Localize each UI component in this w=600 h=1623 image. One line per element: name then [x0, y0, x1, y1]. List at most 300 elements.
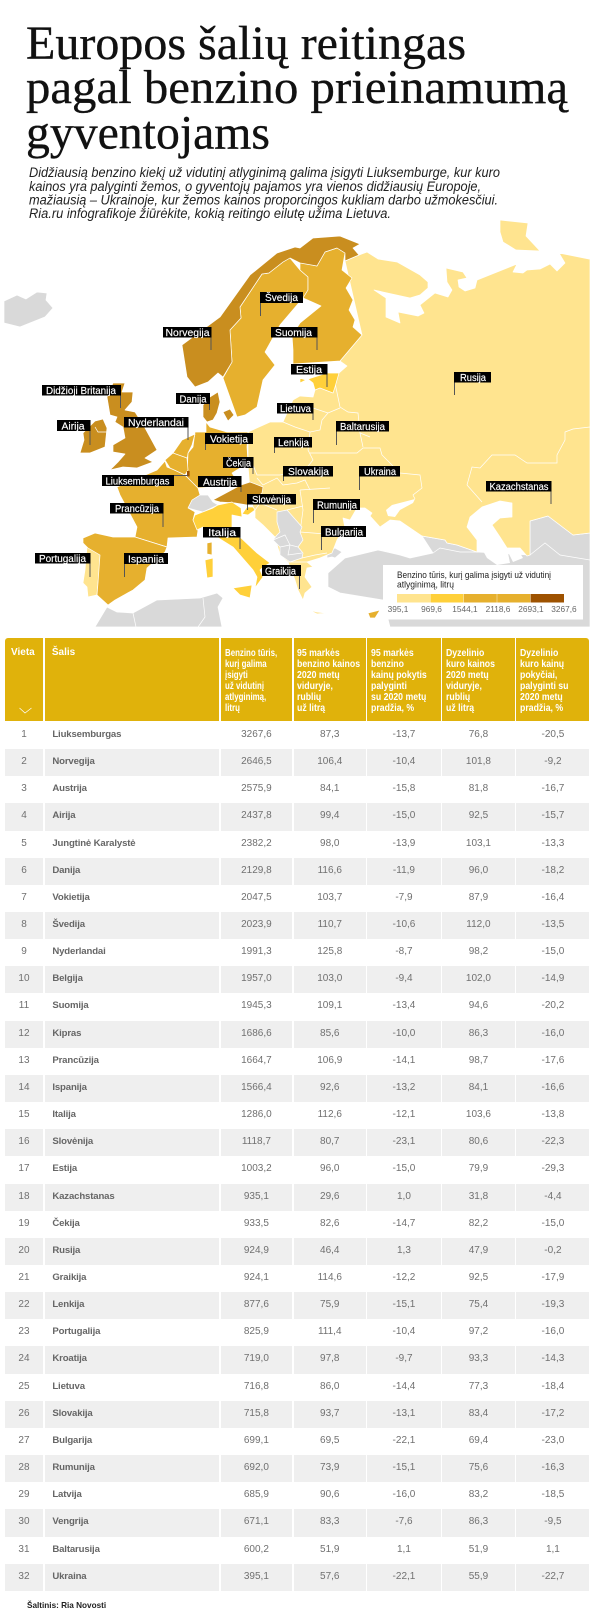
header: benzino kainos: 95 markės	[297, 648, 340, 658]
row 14: 92,6	[320, 1082, 340, 1093]
header: benzino kainų pokytis: su 2020 metų	[371, 692, 427, 702]
header: Vieta	[4, 638, 43, 721]
row 5: 2382,2	[241, 838, 272, 849]
row 9: 98,2	[469, 946, 488, 957]
label: Portugalija: Portugalija	[39, 553, 86, 565]
row 4: 99,4	[320, 810, 340, 821]
row 15: 1286,0	[241, 1109, 272, 1120]
row 17: -15,0	[393, 1163, 415, 1174]
row 2: -10,4	[393, 756, 415, 767]
row 18: -4,4	[544, 1191, 562, 1202]
row 21: -17,9	[542, 1272, 564, 1283]
label: Kazachstanas: Kazachstanas	[490, 481, 548, 493]
label: Suomija: Suomija	[275, 327, 312, 339]
row 3: 81,8	[469, 783, 488, 794]
row 29	[18, 1489, 564, 1500]
legend	[383, 565, 583, 620]
row 14: -16,6	[542, 1082, 564, 1093]
row 29: -16,0	[393, 1489, 415, 1500]
row 6: Danija	[52, 865, 80, 876]
row 5: 5	[21, 838, 27, 849]
label: Baltarusija	[336, 421, 389, 445]
row 31: Baltarusija	[52, 1544, 100, 1555]
map of Europe	[4, 220, 590, 627]
row 26: -13,1	[393, 1408, 415, 1419]
row 23: 825,9	[244, 1326, 269, 1337]
row 27	[18, 1435, 564, 1446]
row 7: 7	[21, 892, 27, 903]
label: Airija	[57, 420, 90, 445]
row 8: 8	[21, 919, 27, 930]
row 15: 103,6	[466, 1109, 491, 1120]
row 22: 22	[18, 1299, 30, 1310]
row 32: 32	[18, 1571, 30, 1582]
row 21: 92,5	[469, 1272, 488, 1283]
row 25: 25	[18, 1381, 30, 1392]
row 19: -14,7	[393, 1218, 415, 1229]
row 10: -9,4	[395, 973, 413, 984]
row 18: 1,0	[397, 1191, 411, 1202]
title: Europos šalių reitingas	[26, 17, 466, 70]
header: benzino kainų pokytis	[367, 638, 441, 721]
map: Caspian, Azov and Black Sea details	[386, 499, 523, 565]
row 10: 1957,0	[241, 973, 272, 984]
row 7: -7,9	[395, 892, 413, 903]
row 31: 1,1	[546, 1544, 560, 1555]
row 13: 98,7	[469, 1055, 488, 1066]
row 19: 82,2	[469, 1218, 488, 1229]
header: dyzelino kainų pokyčiai	[516, 638, 589, 721]
row 23: -16,0	[542, 1326, 564, 1337]
row 6: -18,2	[542, 865, 564, 876]
row 25: Lietuva	[52, 1381, 85, 1392]
label: Nyderlandai: Nyderlandai	[128, 417, 184, 429]
row 25: -18,4	[542, 1381, 564, 1392]
map: Switzerland	[188, 495, 218, 512]
row 25: -14,4	[393, 1381, 415, 1392]
row 6: 96,0	[469, 865, 488, 876]
header: benzino tūris: atlyginimą,	[225, 692, 266, 703]
row 4: -15,7	[542, 810, 564, 821]
row 1: 76,8	[469, 729, 488, 740]
header: benzino kainos: už litrą	[297, 702, 325, 714]
map: mid-gold band (Sweden, Finland, France, Spain, Germany, Benelux)	[83, 248, 380, 618]
intro text: Didžiausią benzino kiekį už vidutinį atlyginimą galima įsigyti Liuksemburge, kur kuro	[29, 165, 500, 180]
row 10: 102,0	[466, 973, 491, 984]
row 32: -22,1	[393, 1571, 415, 1582]
row 2: 2	[21, 756, 27, 767]
row 4: 4	[21, 810, 27, 821]
label: Ispanija: Ispanija	[128, 554, 164, 566]
label: Prancūzija	[110, 503, 164, 527]
row 28: -16,3	[542, 1462, 564, 1473]
row 12: 1686,6	[241, 1028, 272, 1039]
row 11: -13,4	[393, 1000, 415, 1011]
row 15	[18, 1109, 564, 1120]
title: pagal benzino prieinamumą	[26, 61, 569, 114]
label: Danija: Danija	[180, 394, 207, 406]
row 23: Portugalija	[52, 1326, 100, 1337]
row 7: -16,4	[542, 892, 564, 903]
row 16: -23,1	[393, 1136, 415, 1147]
row 11: Suomija	[52, 1000, 89, 1011]
label: Vokietija: Vokietija	[210, 434, 248, 446]
label: Bulgarija: Bulgarija	[325, 526, 363, 538]
row 13: -14,1	[393, 1055, 415, 1066]
row 3: 2575,9	[241, 783, 272, 794]
row 31: 600,2	[244, 1544, 269, 1555]
row 25: 86,0	[320, 1381, 340, 1392]
row 32: -22,7	[542, 1571, 564, 1582]
row 8: 112,0	[466, 919, 491, 930]
row 8: -10,6	[393, 919, 415, 930]
label: Graikija: Graikija	[265, 566, 296, 578]
row 5: -13,9	[393, 838, 415, 849]
row 16	[5, 1129, 589, 1156]
row 5: -13,3	[542, 838, 564, 849]
row 19: Čekija	[52, 1218, 80, 1229]
header: Vieta: Vieta	[11, 646, 35, 658]
row 26	[5, 1401, 589, 1428]
row 30	[5, 1509, 589, 1537]
label: Portugalija	[35, 553, 90, 577]
row 29: -18,5	[542, 1489, 564, 1500]
label: Austrija: Austrija	[203, 476, 237, 488]
row 22: Lenkija	[52, 1299, 84, 1310]
header: benzino kainos: benzino kainos	[297, 658, 360, 670]
row 4: 92,5	[469, 810, 488, 821]
row 28: Rumunija	[52, 1462, 95, 1473]
row 16: -22,3	[542, 1136, 564, 1147]
header: dyzelino kainų pokyčiai: pradžia, %	[520, 702, 563, 714]
row 12: 85,6	[320, 1028, 340, 1039]
row 6: 2129,8	[241, 865, 272, 876]
row 29: Latvija	[52, 1489, 82, 1500]
row 9: 1991,3	[241, 946, 272, 957]
legend: 395,1	[388, 604, 409, 614]
label: Norvegija: Norvegija	[166, 327, 210, 339]
map: ex-Yugoslavia (grey)	[273, 510, 303, 562]
row 17: 96,0	[320, 1163, 340, 1174]
row 10	[5, 966, 589, 993]
label: Švedija: Švedija	[265, 291, 298, 304]
row 17	[18, 1163, 564, 1174]
row 12: -16,0	[542, 1028, 564, 1039]
row 19: 933,5	[244, 1218, 269, 1229]
row 11: -20,2	[542, 1000, 564, 1011]
row 22: -19,3	[542, 1299, 564, 1310]
row 31: 51,9	[320, 1544, 340, 1555]
intro text	[29, 165, 500, 221]
intro text: kainos yra palyginti žemos, o gyventojų pajamos yra vienos didžiausių Europoje,	[29, 179, 481, 194]
label: Rumunija: Rumunija	[317, 500, 357, 512]
row 1: -13,7	[393, 729, 415, 740]
label: Kazachstanas	[486, 481, 552, 504]
row 11: 11	[19, 1000, 29, 1011]
row 12: -10,0	[393, 1028, 415, 1039]
row 31: 31	[18, 1544, 30, 1555]
label: Danija	[176, 393, 210, 410]
header: Šalis	[45, 638, 219, 721]
header: dyzelino kainos	[442, 638, 515, 721]
row 13: 13	[18, 1055, 30, 1066]
row 28: 75,6	[469, 1462, 488, 1473]
row 29: 685,9	[244, 1489, 269, 1500]
row 3: -16,7	[542, 783, 564, 794]
label: Graikija	[262, 565, 301, 589]
map labels	[35, 291, 552, 589]
label: Čekija	[223, 456, 254, 474]
row 5: Jungtinė Karalystė	[52, 838, 135, 849]
header: benzino kainos: 2020 metų	[297, 670, 340, 680]
row 20: -0,2	[544, 1245, 562, 1256]
row 7: 87,9	[469, 892, 488, 903]
row 17: 1003,2	[241, 1163, 272, 1174]
label: Norvegija	[163, 327, 212, 350]
row 3: 84,1	[320, 783, 340, 794]
title	[26, 17, 569, 160]
row 21: -12,2	[393, 1272, 415, 1283]
row 17: 17	[18, 1163, 30, 1174]
row 32: Ukraina	[52, 1571, 86, 1582]
row 29: 83,2	[469, 1489, 488, 1500]
row 16: Slovėnija	[52, 1136, 93, 1147]
label: Didžioji Britanija: Didžioji Britanija	[46, 385, 116, 397]
row 16: 80,6	[469, 1136, 488, 1147]
header: dyzelino kainų pokyčiai: kuro kainų	[520, 658, 564, 670]
row 7: Vokietija	[52, 892, 90, 903]
row 12: Kipras	[52, 1028, 81, 1039]
legend: 969,6	[421, 604, 442, 614]
row 27: 27	[18, 1435, 30, 1446]
label: Didžioji Britanija	[42, 385, 121, 408]
label: Lietuva	[277, 403, 314, 420]
header: dyzelino kainos: 2020 metų	[446, 670, 488, 680]
row 31: 51,9	[469, 1544, 488, 1555]
row 24: -14,3	[542, 1353, 564, 1364]
row 26: Slovakija	[52, 1408, 93, 1419]
row 15: 112,6	[318, 1109, 342, 1120]
row 5: 98,0	[320, 838, 340, 849]
row 27: 69,5	[320, 1435, 340, 1446]
row 16: 16	[18, 1136, 30, 1147]
label: Ispanija	[124, 553, 168, 577]
row 22	[5, 1292, 589, 1319]
row 2	[5, 749, 589, 776]
label: Baltarusija: Baltarusija	[340, 421, 385, 433]
row 29: 29	[18, 1489, 30, 1500]
label: Italija: Italija	[208, 527, 236, 539]
title: gyventojams	[26, 106, 270, 160]
row 27: 69,4	[469, 1435, 488, 1446]
row 27: -22,1	[393, 1435, 415, 1446]
row 26: 93,7	[320, 1408, 340, 1419]
header: benzino kainų pokytis: benzino	[371, 658, 404, 670]
row 12	[5, 1021, 589, 1048]
row 7	[21, 892, 564, 903]
label: Slovakija	[283, 466, 333, 481]
row 28: -15,1	[393, 1462, 415, 1473]
row 23: 111,4	[318, 1326, 342, 1337]
row 8: -13,5	[542, 919, 564, 930]
row 23	[18, 1326, 564, 1337]
row 18: 31,8	[469, 1191, 488, 1202]
row 1: Liuksemburgas	[52, 729, 121, 740]
row 1: -20,5	[542, 729, 564, 740]
map: second band (Italy, Slovenia, Estonia)	[193, 373, 339, 598]
intro text: mažiausią – Ukrainoje, kur žemos kainos proporcingos kukliam darbo užmokesčiui.	[29, 192, 498, 208]
row 30: -7,6	[395, 1516, 413, 1527]
row 30: 83,3	[320, 1516, 340, 1527]
row 19: -15,0	[542, 1218, 564, 1229]
header: benzino tūris: Benzino tūris,	[225, 648, 277, 659]
header: benzino tūris: kurį galima	[225, 659, 266, 670]
row 9: Nyderlandai	[52, 946, 106, 957]
row 26: -17,2	[542, 1408, 564, 1419]
header: dyzelino kainos: už litrą	[446, 702, 474, 714]
row 6	[5, 858, 589, 885]
row 21: 114,6	[318, 1272, 342, 1283]
row 32	[5, 1564, 589, 1591]
row 24: 719,0	[244, 1353, 269, 1364]
row 14: -13,2	[393, 1082, 415, 1093]
header: benzino kainų pokytis: kainų pokytis	[371, 670, 427, 680]
header: benzino kainos	[294, 638, 366, 721]
row 22: 75,4	[469, 1299, 488, 1310]
label: Rusija: Rusija	[460, 372, 486, 384]
label: Estija: Estija	[296, 364, 322, 376]
row 24: 24	[18, 1353, 30, 1364]
row 14: 14	[18, 1082, 30, 1093]
label: Estija	[291, 364, 328, 387]
row 30: 86,3	[469, 1516, 488, 1527]
row 10: -14,9	[542, 973, 564, 984]
legend: Benzino tūris, kurį galima įsigyti už vidutinį	[397, 570, 551, 581]
row 6: 116,6	[318, 865, 342, 876]
row 18	[5, 1184, 589, 1211]
row 11: 109,1	[317, 1000, 342, 1011]
row 5	[21, 838, 564, 849]
row 3: -15,8	[393, 783, 415, 794]
row 10: 10	[18, 973, 30, 984]
row 25: 716,8	[244, 1381, 269, 1392]
row 20: 20	[18, 1245, 30, 1256]
row 12: 86,3	[469, 1028, 488, 1039]
row 11: 94,6	[469, 1000, 488, 1011]
row 22: -15,1	[393, 1299, 415, 1310]
label: Bulgarija	[321, 526, 366, 550]
row 24: -9,7	[395, 1353, 413, 1364]
label: Nyderlandai	[124, 417, 188, 440]
row 25	[18, 1381, 564, 1392]
row 23: 97,2	[469, 1326, 488, 1337]
row 6: 6	[21, 865, 27, 876]
header: dyzelino kainų pokyčiai: pokyčiai,	[520, 670, 558, 680]
row 1: 3267,6	[241, 729, 272, 740]
header: dyzelino kainų pokyčiai: palyginti su	[520, 680, 569, 692]
label: Italija	[203, 527, 240, 549]
row 13: -17,6	[542, 1055, 564, 1066]
row 27: 699,1	[244, 1435, 269, 1446]
row 7: 2047,5	[241, 892, 272, 903]
row 5: 103,1	[466, 838, 491, 849]
row 2: Norvegija	[52, 756, 95, 767]
row 20: 47,9	[469, 1245, 488, 1256]
row 9: -8,7	[395, 946, 413, 957]
row 6: -11,9	[393, 865, 415, 876]
label: Prancūzija: Prancūzija	[115, 503, 159, 515]
row 21: Graikija	[52, 1272, 86, 1283]
label: Slovėnija	[247, 494, 296, 510]
row 9	[21, 946, 564, 957]
map: top band (Luxembourg)	[187, 471, 190, 476]
row 10: 103,0	[317, 973, 342, 984]
national borders	[467, 427, 590, 485]
row 24	[5, 1346, 589, 1374]
row 25: 77,3	[469, 1381, 488, 1392]
row 13: 1664,7	[241, 1055, 272, 1066]
header: benzino kainų pokytis: pradžia, %	[371, 702, 414, 714]
table rows	[5, 729, 589, 1591]
row 16: 1118,7	[242, 1136, 271, 1147]
row 26: 83,4	[469, 1408, 488, 1419]
row 22: 877,6	[244, 1299, 269, 1310]
header: benzino kainų pokytis: 95 markės	[371, 648, 414, 658]
label: Lietuva: Lietuva	[280, 403, 311, 415]
label: Slovėnija: Slovėnija	[252, 494, 291, 506]
row 15: -12,1	[393, 1109, 415, 1120]
row 32: 55,9	[469, 1571, 488, 1582]
header: benzino tūris: įsigyti	[225, 670, 247, 681]
row 2: 106,4	[317, 756, 342, 767]
row 21: 924,1	[244, 1272, 269, 1283]
row 28: 692,0	[244, 1462, 269, 1473]
label: Lenkija: Lenkija	[278, 437, 309, 449]
row 23: -10,4	[393, 1326, 415, 1337]
row 19	[18, 1218, 564, 1229]
row 2: -9,2	[544, 756, 562, 767]
row 4	[5, 803, 589, 831]
row 8: Švedija	[52, 919, 85, 930]
row 19: 82,6	[320, 1218, 340, 1229]
row 9: -15,0	[542, 946, 564, 957]
row 30: -9,5	[544, 1516, 562, 1527]
map: light band (Russia, Kazakhstan, Eastern Europe)	[83, 220, 590, 614]
row 15: Italija	[52, 1109, 76, 1120]
row 14	[5, 1075, 589, 1102]
row 32: 57,6	[320, 1571, 340, 1582]
row 26: 26	[18, 1408, 30, 1419]
row 20: Rusija	[52, 1245, 80, 1256]
header: benzino kainos: viduryje,	[297, 680, 333, 692]
row 18: Kazachstanas	[52, 1191, 115, 1202]
label: Ukraina	[359, 466, 400, 490]
row 14: 1566,4	[241, 1082, 272, 1093]
row 19: 19	[18, 1218, 30, 1229]
row 18: 18	[18, 1191, 30, 1202]
row 4: -15,0	[393, 810, 415, 821]
row 27: Bulgarija	[52, 1435, 92, 1446]
header: benzino tūris: litrų	[225, 703, 240, 714]
legend: 3267,6	[551, 604, 577, 614]
row 23: 23	[18, 1326, 30, 1337]
label: Slovakija: Slovakija	[288, 466, 329, 478]
row 3	[21, 783, 564, 794]
row 16: 80,7	[320, 1136, 340, 1147]
row 24: 93,3	[469, 1353, 488, 1364]
row 30: 671,1	[244, 1516, 269, 1527]
row 4: 2437,8	[241, 810, 272, 821]
